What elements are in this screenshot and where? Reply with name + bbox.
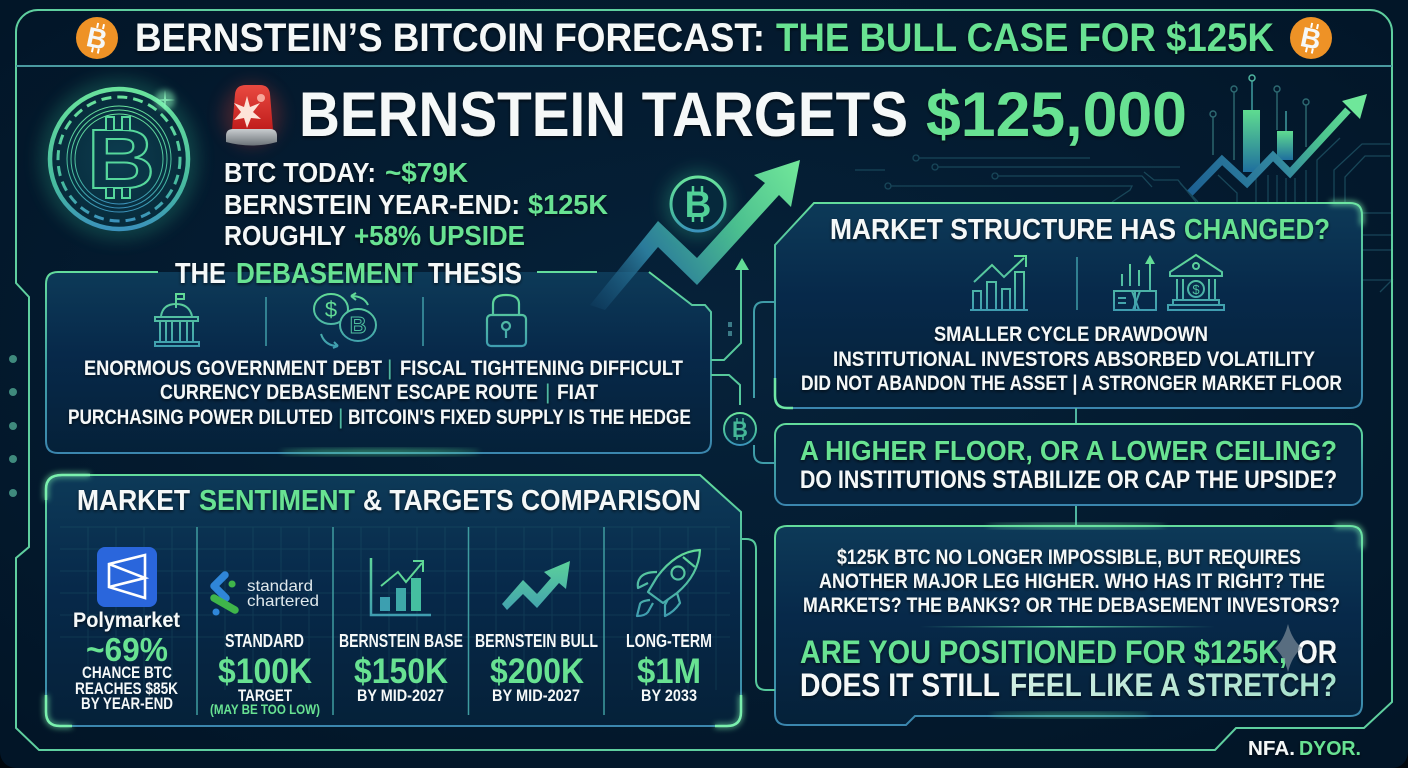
- debasement body text: ENORMOUS GOVERNMENT DEBT: [84, 357, 382, 380]
- icon: bank with dollar seal: $: [1192, 282, 1200, 297]
- debasement body text: |: [338, 406, 343, 429]
- header bar: [76, 16, 1332, 60]
- column: polymarket: ~69%: [86, 631, 168, 668]
- icon: right bitcoin coin: B: [1298, 21, 1324, 56]
- column: bernstein bull: BY MID-2027: [492, 686, 580, 705]
- icon: red siren: [222, 83, 282, 147]
- column: bernstein base: BERNSTEIN BASE: [339, 631, 463, 651]
- column: long-term: BY 2033: [641, 686, 697, 705]
- closing paragraph: ANOTHER MAJOR LEG HIGHER. WHO HAS IT RIGHT? THE: [819, 570, 1325, 593]
- call to action question: OR: [1297, 634, 1337, 670]
- comparison heading: SENTIMENT: [199, 485, 355, 517]
- panel: market sentiment comparison: [46, 475, 741, 726]
- market structure body text: INSTITUTIONAL INVESTORS ABSORBED VOLATILITY: [833, 348, 1315, 371]
- key stats: ~$79K: [385, 157, 468, 188]
- column: bernstein bull: [475, 561, 598, 705]
- icon: government building: [155, 294, 199, 346]
- header title: [135, 16, 1274, 60]
- debasement body text: CURRENCY DEBASEMENT ESCAPE ROUTE: [160, 381, 538, 404]
- icon: connector bitcoin: [724, 413, 756, 445]
- column: long-term: [626, 550, 712, 705]
- call to action question: DOES IT STILL: [800, 667, 1000, 703]
- icon: dollar to bitcoin exchange: $: [325, 297, 337, 322]
- key stats: ROUGHLY: [224, 220, 346, 251]
- icon: dollar to bitcoin exchange: [314, 293, 376, 348]
- debasement heading: DEBASEMENT: [236, 258, 418, 290]
- column: standard chartered: chartered: [247, 593, 319, 610]
- icon: dollar to bitcoin exchange: B: [350, 312, 366, 338]
- connector arrow: thesis to market structure: [711, 258, 775, 463]
- column: standard chartered: STANDARD: [225, 631, 304, 651]
- side dots: [9, 355, 17, 497]
- disclaimer: NFA.: [1248, 738, 1295, 760]
- header title: BERNSTEIN’S BITCOIN FORECAST:: [135, 16, 765, 60]
- icon: left bitcoin coin: B: [84, 21, 110, 56]
- icon: standard chartered logo: [214, 575, 235, 612]
- panel: floor or ceiling: [775, 424, 1362, 505]
- panel: market structure: [775, 203, 1362, 408]
- debasement body text: PURCHASING POWER DILUTED: [68, 406, 333, 429]
- main title: $125,000: [926, 80, 1187, 150]
- panel: call to action: [775, 524, 1362, 725]
- column: polymarket: REACHES $85K: [75, 679, 179, 698]
- column: polymarket: [73, 547, 180, 713]
- column: long-term: $1M: [637, 652, 701, 691]
- market structure body text: SMALLER CYCLE DRAWDOWN: [934, 323, 1208, 346]
- icon: bull arrow: [502, 561, 570, 610]
- market structure heading: MARKET STRUCTURE HAS: [830, 214, 1176, 246]
- disclaimer: [1248, 738, 1361, 760]
- icon: connector bitcoin: B: [732, 417, 748, 442]
- comparison heading: MARKET: [77, 485, 190, 517]
- column: bernstein bull: $200K: [490, 652, 584, 691]
- column: standard chartered: standard: [247, 578, 313, 595]
- closing paragraph: [803, 546, 1340, 617]
- call to action question: FEEL LIKE A STRETCH?: [1010, 667, 1337, 703]
- debasement heading: THE: [175, 258, 226, 290]
- debasement body text: |: [545, 381, 550, 404]
- market structure body text: [801, 323, 1342, 395]
- icon: large bitcoin coin: B: [87, 112, 155, 206]
- column: standard chartered: TARGET: [238, 686, 292, 705]
- debasement body text: BITCOIN'S FIXED SUPPLY IS THE HEDGE: [348, 406, 691, 429]
- icon: floating bitcoin: B: [685, 184, 711, 225]
- debasement heading: [175, 258, 522, 290]
- key stats: +58% UPSIDE: [354, 220, 525, 251]
- column: standard chartered: [210, 575, 320, 717]
- column: standard chartered: (MAY BE TOO LOW): [210, 701, 320, 717]
- icon: base bar chart: [371, 558, 431, 615]
- debasement body text: |: [387, 357, 392, 380]
- column: bernstein base: BY MID-2027: [357, 686, 444, 705]
- call to action question: ARE YOU POSITIONED FOR $125K,: [800, 634, 1287, 670]
- icon: right bitcoin coin: [1290, 17, 1332, 59]
- comparison heading: [77, 485, 701, 517]
- comparison heading: & TARGETS COMPARISON: [363, 485, 701, 517]
- header title: THE BULL CASE FOR $125K: [776, 16, 1274, 60]
- icon: bank with dollar seal: [1168, 255, 1224, 310]
- column: long-term: LONG-TERM: [626, 631, 712, 651]
- floor question heading: A HIGHER FLOOR, OR A LOWER CEILING?: [800, 435, 1337, 466]
- icon: padlock: [487, 295, 526, 346]
- icon: rising bar chart: [970, 256, 1028, 310]
- connector: comparison to closing panel: [741, 539, 775, 690]
- main title: BERNSTEIN TARGETS: [299, 80, 908, 150]
- icon: institutional investors: [1114, 255, 1156, 310]
- sparkle: [1275, 624, 1302, 672]
- icon: large bitcoin coin: [39, 78, 199, 240]
- column: polymarket: CHANCE BTC: [82, 663, 172, 682]
- market structure heading: CHANGED?: [1184, 214, 1330, 246]
- debasement body text: FISCAL TIGHTENING DIFFICULT: [400, 357, 683, 380]
- column: bernstein bull: BERNSTEIN BULL: [475, 631, 598, 651]
- call to action question: [800, 634, 1337, 703]
- key stats: $125K: [528, 189, 608, 220]
- closing paragraph: $125K BTC NO LONGER IMPOSSIBLE, BUT REQUIRES: [837, 546, 1301, 569]
- icon: left bitcoin coin: [76, 17, 118, 59]
- column: bernstein base: $150K: [354, 652, 448, 691]
- debasement body text: [68, 357, 691, 429]
- key stats: [224, 157, 608, 251]
- debasement heading: THESIS: [428, 258, 522, 290]
- chart decoration: candles and arrow: [1190, 75, 1367, 193]
- icon: floating bitcoin: [664, 170, 732, 238]
- column: standard chartered: $100K: [218, 652, 312, 691]
- debasement body text: FIAT: [557, 381, 598, 404]
- key stats: BTC TODAY:: [224, 157, 376, 188]
- icon: polymarket logo: [97, 547, 157, 607]
- column: polymarket: Polymarket: [73, 609, 180, 632]
- decorative circuit: [855, 138, 1392, 292]
- disclaimer: DYOR.: [1299, 738, 1361, 760]
- column: polymarket: BY YEAR-END: [81, 694, 173, 713]
- key stats: BERNSTEIN YEAR-END:: [224, 189, 520, 220]
- icon: rocket: [637, 550, 700, 616]
- panel: debasement thesis: [46, 258, 711, 454]
- column: bernstein base: [339, 558, 463, 705]
- big rising arrow: [590, 160, 800, 310]
